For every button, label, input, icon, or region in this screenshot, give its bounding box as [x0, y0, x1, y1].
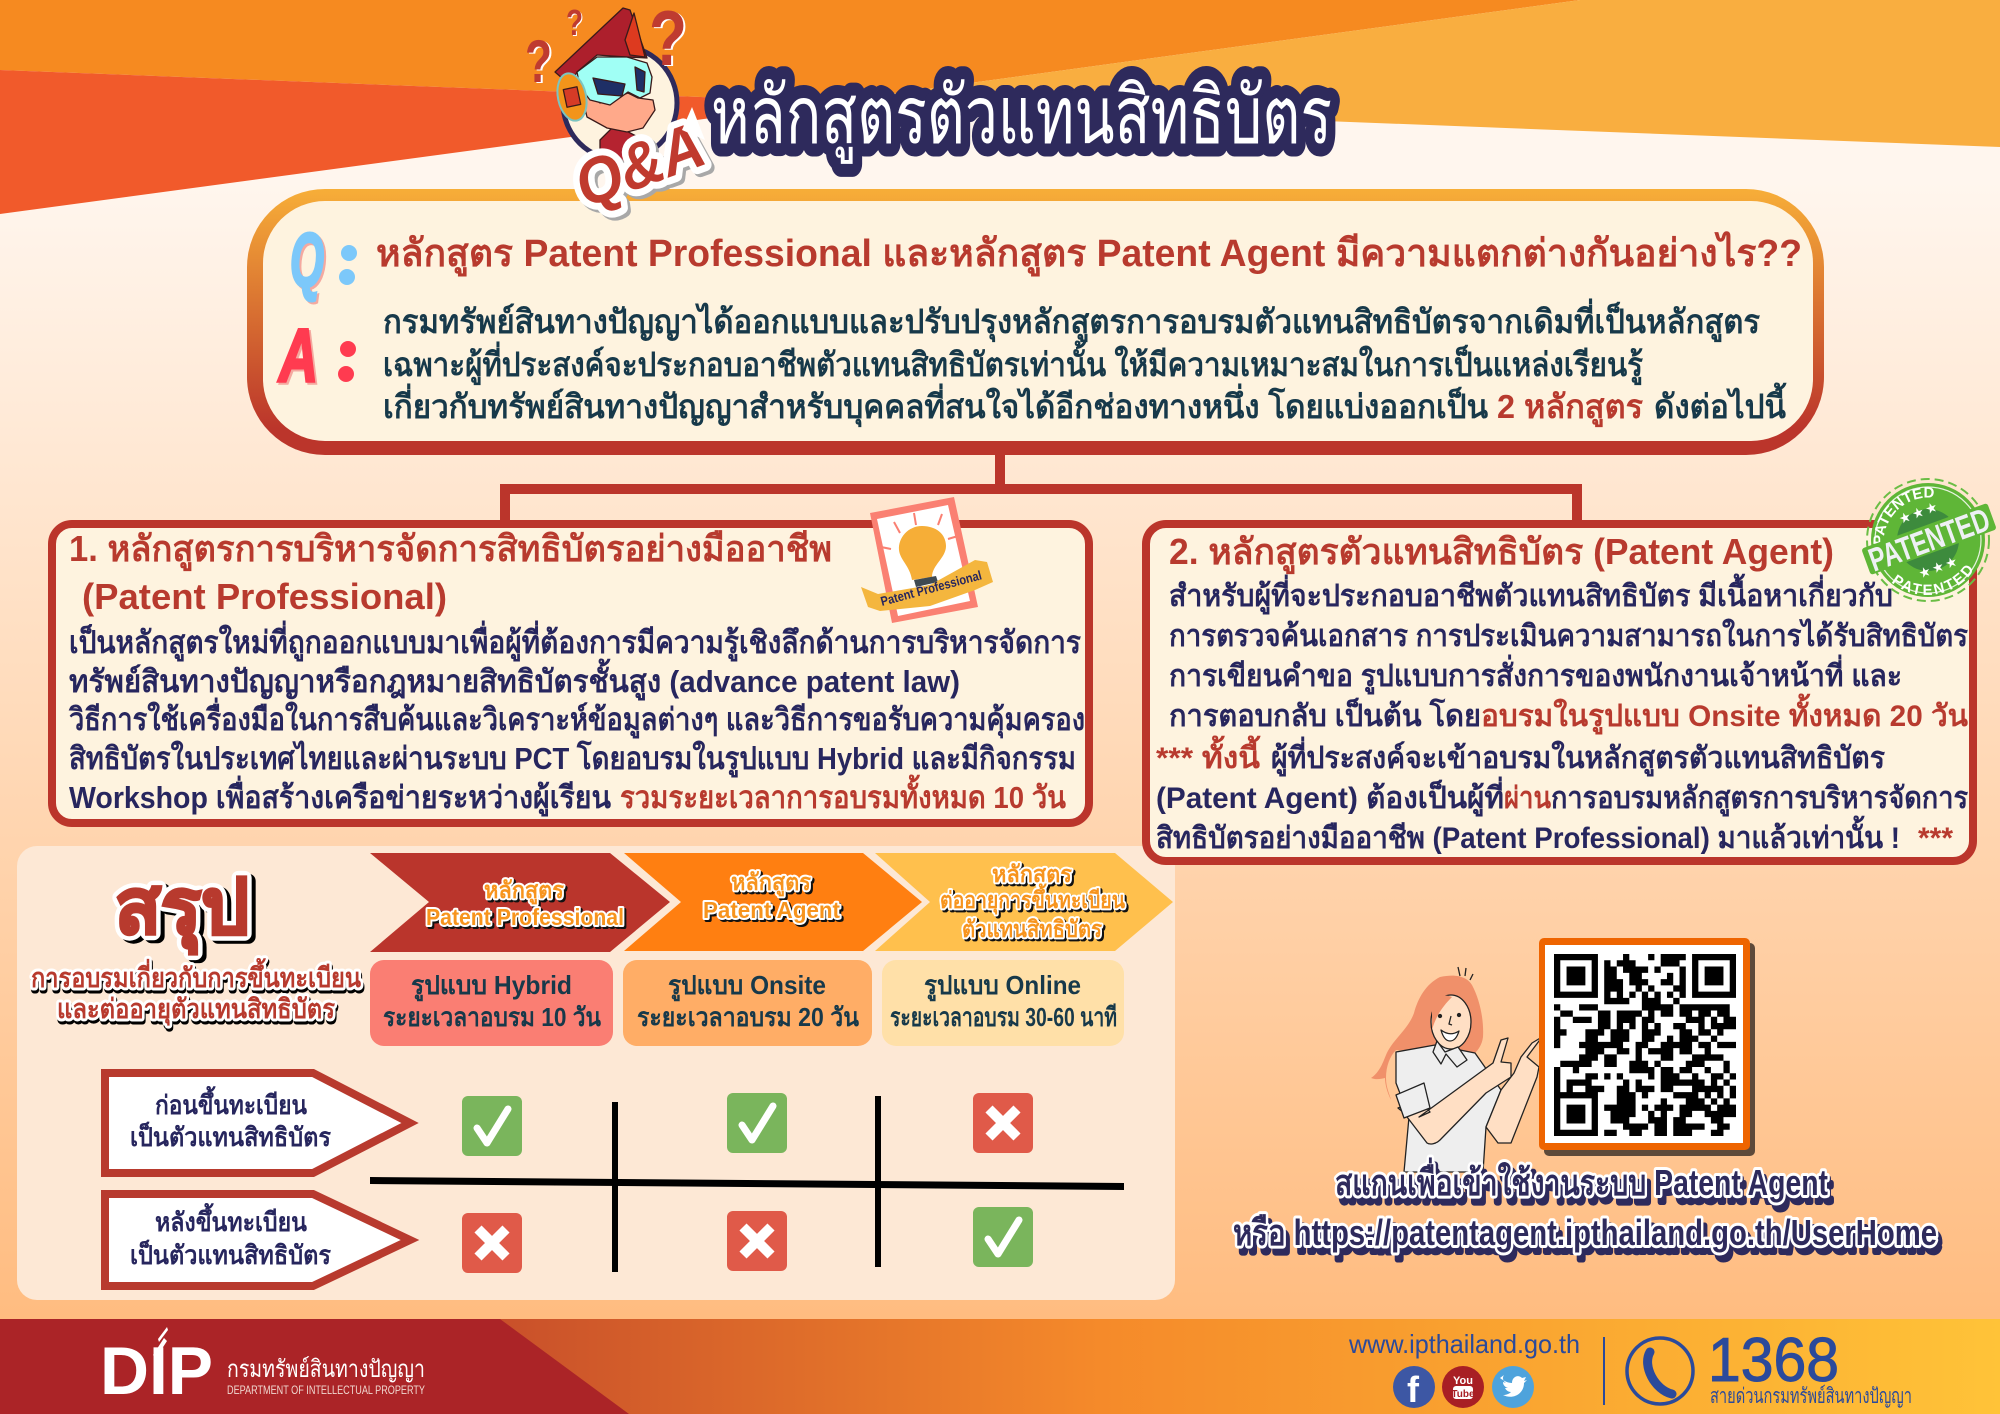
icon: phone	[1627, 1338, 1693, 1404]
chevron: renewal: ต่ออายุการขึ้นทะเบียน	[940, 883, 1125, 915]
icon: check row 1 col 2	[727, 1093, 787, 1153]
answer text	[383, 298, 1787, 428]
body text: ผู้ที่ประสงค์จะเข้าอบรมในหลักสูตรตัวแทนสิทธิบัตร	[1271, 736, 1885, 777]
card: Onsite	[623, 960, 872, 1046]
footer	[0, 1319, 2000, 1414]
body text: ***	[1918, 822, 1953, 855]
badge: patented stamp: ★ ★ ★	[1918, 556, 1959, 581]
A label	[278, 313, 356, 399]
chevron: Patent Professional: Patent Professional	[426, 904, 624, 930]
panel: summary	[17, 846, 1175, 1300]
badge: patented stamp: PATENTED	[1873, 487, 1934, 544]
body text: การเขียนคำขอ รูปแบบการสั่งการของพนักงานเจ้าหน้าที่ และ	[1169, 654, 1902, 695]
question and answer panel	[247, 189, 1824, 455]
icon: facebook	[1393, 1366, 1435, 1410]
A label: A	[280, 315, 320, 399]
A label: A	[278, 313, 318, 397]
card: Online	[882, 960, 1124, 1046]
chevron: Patent Professional: หลักสูตร	[484, 877, 565, 905]
heading: 2. หลักสูตรตัวแทนสิทธิบัตร (Patent Agent)	[1169, 531, 1834, 575]
heading: summary: สรุป	[115, 865, 249, 955]
chevron: renewal	[875, 853, 1173, 951]
body text: สิทธิบัตรในประเทศไทยและผ่านระบบ PCT โดยอบรมในรูปแบบ Hybrid และมีกิจกรรม	[69, 740, 1076, 778]
body text: ทรัพย์สินทางปัญญาหรือกฎหมายสิทธิบัตรชั้นสูง (advance patent law)	[69, 658, 960, 701]
chevron: Patent Agent	[624, 853, 922, 951]
table grid lines	[370, 1096, 1124, 1272]
body text: การตอบกลับ เป็นต้น โดย	[1169, 697, 1481, 733]
question marks: ?	[527, 29, 554, 96]
chevron: Patent Agent: หลักสูตร	[731, 869, 812, 897]
question marks	[525, 0, 689, 96]
icon: twitter	[1492, 1366, 1534, 1408]
icon: check row 2 col 3	[973, 1207, 1033, 1267]
title: หลักสูตรตัวแทนสิทธิบัตร	[711, 71, 1332, 164]
answer text: ดังต่อไปนี้	[1654, 382, 1787, 425]
badge: light bulb certificate	[861, 497, 993, 623]
answer text: กรมทรัพย์สินทางปัญญาได้ออกแบบและปรับปรุงหลักสูตรการอบรมตัวแทนสิทธิบัตรจากเดิมที่เป็นหลักสูตร	[383, 298, 1760, 343]
hotline number: 1368	[1708, 1326, 1839, 1395]
icon: cross row 2 col 2	[727, 1211, 787, 1271]
chevron: Patent Professional	[370, 853, 670, 952]
hotline caption: สายด่วนกรมทรัพย์สินทางปัญญา	[1710, 1384, 1912, 1408]
body text: Workshop เพื่อสร้างเครือข่ายระหว่างผู้เรียน	[69, 775, 611, 817]
card: Online: ระยะเวลาอบรม 30-60 นาที	[890, 1002, 1117, 1032]
body text: สำหรับผู้ที่จะประกอบอาชีพตัวแทนสิทธิบัตร มีเนื้อหาเกี่ยวกับ	[1169, 573, 1893, 615]
body text: (Patent Agent) ต้องเป็นผู้ที่	[1156, 776, 1504, 817]
icon: facebook: f	[1407, 1369, 1420, 1410]
heading: (Patent Professional)	[82, 576, 447, 617]
Q label: Q	[290, 218, 324, 303]
body text: วิธีการใช้เครื่องมือในการสืบค้นและวิเคราะห์ข้อมูลต่างๆ และวิธีการขอรับความคุ้มครอง	[68, 697, 1085, 739]
row label: before registration	[105, 1073, 410, 1173]
card: Onsite: ระยะเวลาอบรม 20 วัน	[637, 1002, 859, 1032]
body text: อบรมในรูปแบบ Onsite ทั้งหมด 20 วัน	[1481, 693, 1968, 735]
row label: after registration: เป็นตัวแทนสิทธิบัตร	[130, 1239, 331, 1270]
heading: 1. หลักสูตรการบริหารจัดการสิทธิบัตรอย่างมืออาชีพ	[69, 528, 832, 572]
card: Hybrid	[370, 960, 613, 1046]
panel: Patent Agent	[1142, 478, 1996, 865]
body text	[1156, 573, 1968, 855]
body text: สิทธิบัตรอย่างมืออาชีพ (Patent Professional) มาแล้วเท่านั้น !	[1156, 815, 1900, 855]
scan caption	[1233, 1157, 1937, 1253]
row label: after registration: หลังขึ้นทะเบียน	[155, 1202, 307, 1237]
divider	[1603, 1337, 1605, 1405]
row label: after registration	[105, 1194, 410, 1286]
department name	[227, 1355, 425, 1397]
answer text: 2 หลักสูตร	[1497, 388, 1643, 428]
department name: กรมทรัพย์สินทางปัญญา	[227, 1355, 425, 1383]
character	[553, 8, 655, 165]
question marks: ?	[566, 2, 583, 43]
heading	[69, 528, 832, 617]
badge: patented stamp: ★ ★ ★	[1898, 501, 1939, 526]
icon: check row 1 col 1	[462, 1096, 522, 1156]
card: Onsite: รูปแบบ Onsite	[668, 970, 826, 1002]
icon: cross row 1 col 3	[973, 1093, 1033, 1153]
question text: หลักสูตร Patent Professional และหลักสูตร Patent Agent มีความแตกต่างกันอย่างไร??	[376, 231, 1802, 277]
subheading: และต่ออายุตัวแทนสิทธิบัตร	[57, 994, 335, 1026]
heading: summary: สรุป	[115, 865, 249, 955]
illustration: woman pointing	[1371, 967, 1542, 1172]
website: www.ipthailand.go.th	[1348, 1329, 1580, 1359]
body text: การอบรมหลักสูตรการบริหารจัดการ	[1551, 782, 1968, 817]
department name: DEPARTMENT OF INTELLECTUAL PROPERTY	[227, 1383, 425, 1397]
body text: เป็นหลักสูตรใหม่ที่ถูกออกแบบมาเพื่อผู้ที่ต้องการมีความรู้เชิงลึกด้านการบริหารจัดการ	[69, 620, 1081, 662]
row label: before registration: เป็นตัวแทนสิทธิบัตร	[130, 1121, 331, 1152]
panel: Patent Professional	[52, 497, 1089, 823]
question marks: ?	[567, 3, 584, 44]
body text	[68, 620, 1085, 817]
chevron: Patent Agent: Patent Agent	[703, 897, 840, 923]
chevron: renewal: หลักสูตร	[992, 861, 1073, 889]
connector lines	[500, 455, 1582, 522]
icon: cross row 2 col 1	[462, 1213, 522, 1273]
mascot with question marks	[525, 0, 714, 221]
badge: light bulb certificate: Patent Professional	[879, 567, 983, 609]
icon: youtube: You	[1453, 1375, 1473, 1387]
answer text: เฉพาะผู้ที่ประสงค์จะประกอบอาชีพตัวแทนสิทธิบัตรเท่านั้น ให้มีความเหมาะสมในการเป็นแหล่งเรียนรู้	[383, 340, 1643, 386]
icon: youtube: Tube	[1451, 1389, 1475, 1400]
body text: ผ่าน	[1504, 782, 1551, 815]
Q label: Q	[292, 220, 326, 305]
subheading	[31, 957, 361, 1026]
answer text: เกี่ยวกับทรัพย์สินทางปัญญาสำหรับบุคคลที่สนใจได้อีกช่องทางหนึ่ง โดยแบ่งออกเป็น	[383, 383, 1488, 428]
icon: youtube	[1442, 1366, 1484, 1408]
scan caption: สแกนเพื่อเข้าใช้งานระบบ Patent Agent	[1335, 1157, 1828, 1203]
DIP logo: DIP	[100, 1333, 213, 1409]
QR code	[1539, 938, 1755, 1156]
card: Online: รูปแบบ Online	[924, 970, 1081, 1002]
badge: patented stamp: PATENTED	[1892, 566, 1972, 595]
question marks: ?	[525, 28, 552, 95]
Q&A lettering: Q&A	[565, 108, 714, 221]
body text: *** ทั้งนี้	[1156, 735, 1261, 775]
subheading: การอบรมเกี่ยวกับการขึ้นทะเบียน	[31, 957, 361, 993]
row label: before registration: ก่อนขึ้นทะเบียน	[155, 1085, 307, 1120]
chevron: renewal: ตัวแทนสิทธิบัตร	[962, 916, 1103, 942]
card: Hybrid: ระยะเวลาอบรม 10 วัน	[383, 1002, 601, 1032]
body text: รวมระยะเวลาการอบรมทั้งหมด 10 วัน	[620, 774, 1066, 815]
card: Hybrid: รูปแบบ Hybrid	[411, 970, 572, 1002]
